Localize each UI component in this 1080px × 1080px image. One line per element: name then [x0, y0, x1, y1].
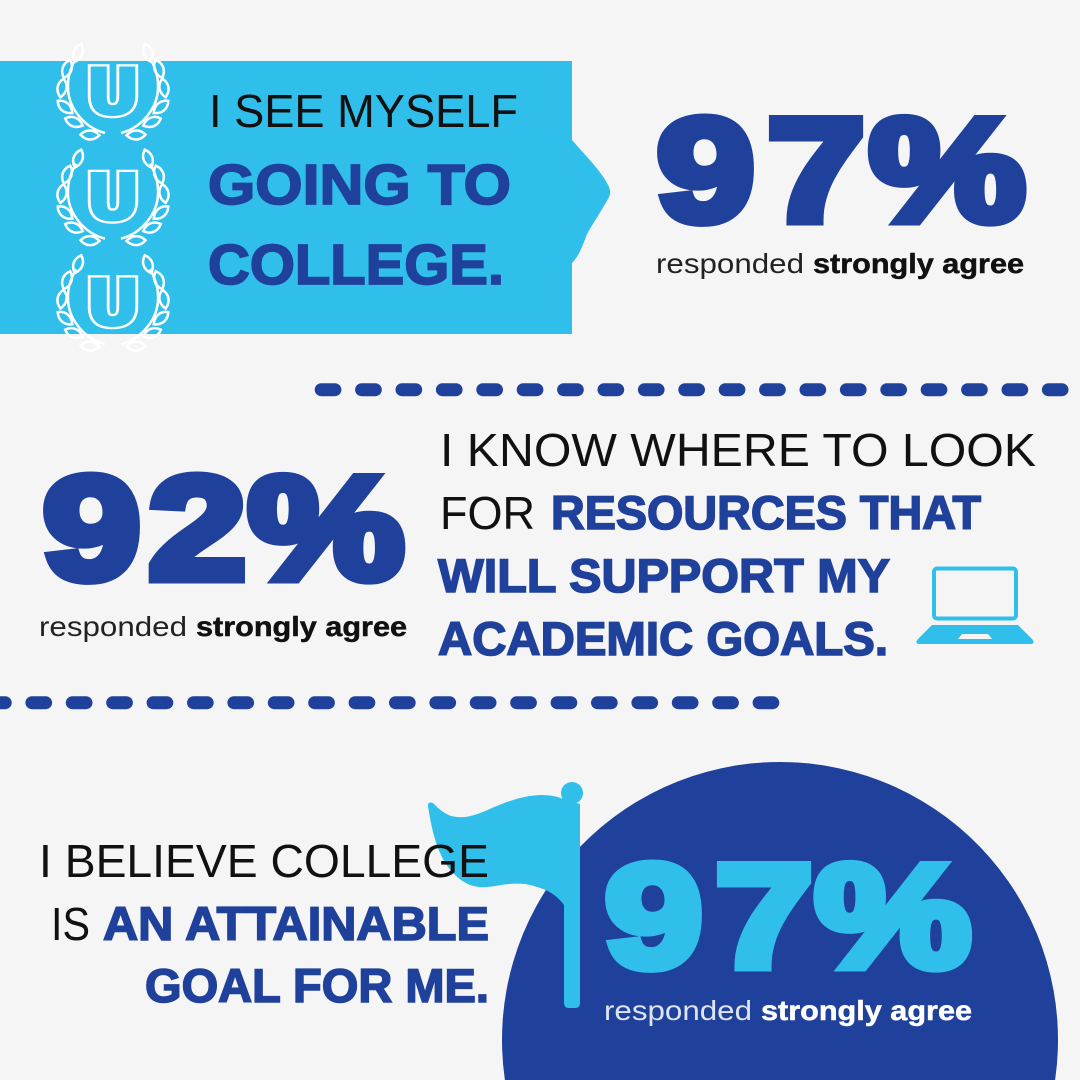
dashed divider top: [321, 383, 1062, 396]
stat: 97% going to college: strongly agree: [813, 248, 1024, 279]
heading: I know where to look for resources: FOR: [440, 487, 535, 539]
heading: I believe college is an attainable goal: I BELIEVE COLLEGE: [39, 835, 489, 887]
heading: I see myself going to college: COLLEGE.: [208, 233, 504, 297]
icon: laurel wreath 1: U: [87, 57, 139, 136]
heading: I know where to look for resources: I KNOW WHERE TO LOOK: [440, 424, 1036, 476]
icon: laptop: [916, 568, 1034, 644]
icon: laurel wreath 3: U: [87, 268, 139, 347]
icon: flag: [428, 782, 583, 1008]
icon: laurel wreath 1: U: [87, 57, 139, 136]
stat: 97% attainable goal: strongly agree: [761, 995, 972, 1026]
dashed divider bottom: [0, 696, 773, 709]
icon: laurel wreath 3: [55, 254, 171, 351]
stat: 92% resources: strongly agree: [196, 611, 407, 642]
panel: going to college banner: [0, 61, 610, 334]
panel: navy circle: [502, 762, 1058, 1080]
heading: I believe college is an attainable goal: GOAL FOR ME.: [145, 959, 489, 1012]
icon: three laurel wreaths with U: [55, 43, 171, 351]
icon: laurel wreath 3: U: [87, 268, 139, 347]
heading: I see myself going to college: GOING TO: [208, 153, 511, 217]
heading: I believe college is an attainable goal: [39, 835, 489, 1012]
heading: I see myself going to college: [208, 85, 518, 297]
icon: laurel wreath 2: U: [87, 163, 139, 242]
heading: I know where to look for resources: WILL SUPPORT MY: [438, 549, 890, 602]
icon: laurel wreath 1: [55, 43, 171, 140]
heading: I believe college is an attainable goal: IS: [51, 898, 90, 950]
icon: laurel wreath 2: U: [87, 163, 139, 242]
heading: I see myself going to college: I SEE MYSELF: [209, 85, 518, 137]
heading: I know where to look for resources: RESOURCES THAT: [551, 486, 981, 539]
icon: laurel wreath 2: [55, 148, 171, 245]
stat: 92% resources: 92%: [43, 447, 404, 610]
heading: I know where to look for resources: [438, 424, 1036, 665]
stat: 97% attainable goal: 97%: [605, 835, 971, 998]
heading: I know where to look for resources: ACADEMIC GOALS.: [438, 612, 888, 665]
stat: 97% going to college: 97%: [657, 89, 1025, 252]
stat: 92% resources: responded: [39, 611, 187, 642]
stat: 97% attainable goal: responded: [604, 995, 752, 1026]
stat: 97% going to college: responded: [656, 248, 804, 279]
heading: I believe college is an attainable goal: AN ATTAINABLE: [103, 897, 489, 950]
